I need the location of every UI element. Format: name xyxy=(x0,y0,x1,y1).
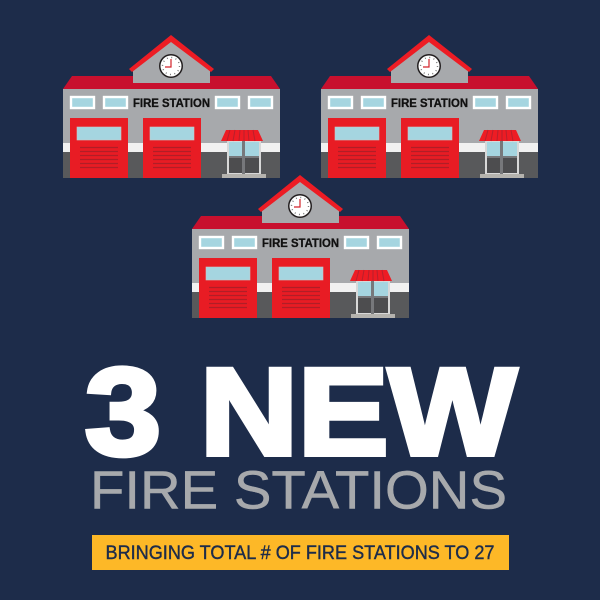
fire station illustration: top left xyxy=(63,35,280,178)
headline: 3 NEW: 3 xyxy=(85,344,161,482)
banner xyxy=(92,535,509,570)
headline: 3 NEW: NEW xyxy=(200,344,516,482)
building sign: FIRE STATION xyxy=(133,98,210,110)
headline: 3 NEW xyxy=(85,344,516,482)
banner text: BRINGING TOTAL # OF FIRE STATIONS TO 27 xyxy=(106,543,494,564)
fire station illustration: center xyxy=(192,175,409,318)
fire station illustration: top right xyxy=(321,35,538,178)
building sign: FIRE STATION xyxy=(391,98,468,110)
building sign: FIRE STATION xyxy=(262,238,339,250)
subheading: FIRE STATIONS: FIRE STATIONS xyxy=(90,460,507,520)
